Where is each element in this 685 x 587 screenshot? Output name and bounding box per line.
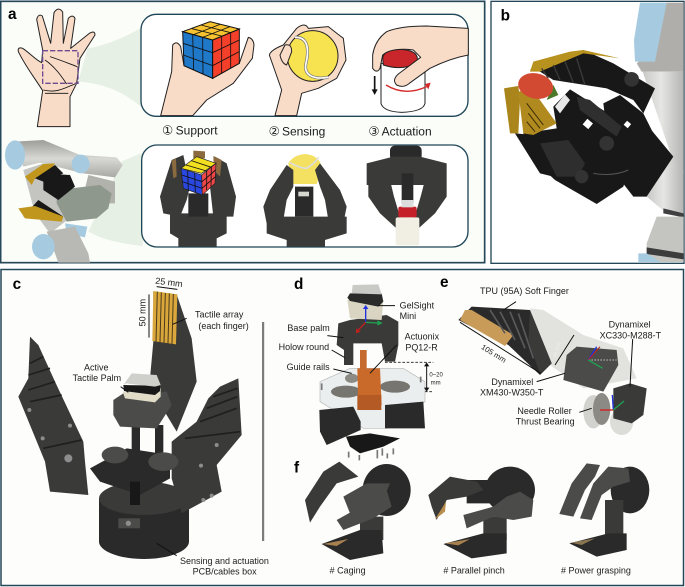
panel b: gripper holding strawberry xyxy=(491,1,684,263)
leader lines xyxy=(503,302,633,412)
fingers with tactile array xyxy=(504,86,557,177)
label: 25 mm: 25 mm xyxy=(155,276,183,289)
soft finger xyxy=(458,307,552,375)
label: sensing: ② xyxy=(269,124,280,138)
label: xc330: XC330-M288-T xyxy=(600,330,662,340)
label: 105 mm: 105 mm xyxy=(480,342,508,365)
label: dynamixel xm: Dynamixel xyxy=(491,377,533,387)
stroke range xyxy=(385,362,433,392)
gripper: parallel pinch xyxy=(428,467,535,558)
label: tactile array: Tactile array xyxy=(195,310,244,320)
label: needle roller: Needle Roller xyxy=(517,406,572,416)
label: base palm: Base palm xyxy=(287,323,330,333)
translucent housing xyxy=(530,308,637,388)
dimension arrows xyxy=(121,287,187,556)
gripper supporting cube xyxy=(160,151,236,247)
icon: hand holding cube xyxy=(161,22,254,116)
panel letter e: e xyxy=(440,274,449,291)
label: PCB cables box: PCB/cables box xyxy=(193,567,257,577)
sensing box cylinder xyxy=(99,482,189,559)
label: mini: Mini xyxy=(400,311,416,321)
divider xyxy=(262,322,264,541)
coordinate axes xyxy=(356,305,383,333)
label: parallel pinch: # Parallel pinch xyxy=(443,566,505,576)
panel: human hand interactions xyxy=(141,14,468,116)
label: power grasping: # Power grasping xyxy=(561,566,631,576)
panel c: gripper overview xyxy=(13,276,269,577)
panel a: human palm functions and gripper analogues xyxy=(1,1,485,263)
gripper: caging xyxy=(305,462,411,560)
actuator orange xyxy=(357,350,382,410)
panel letter a: a xyxy=(8,6,17,23)
icon: strawberry xyxy=(516,70,558,102)
label: guide rails: Guide rails xyxy=(287,362,330,372)
icon: human hand with palm region xyxy=(18,9,95,127)
panel: gripper interactions xyxy=(142,145,468,247)
panel e: finger and joints xyxy=(458,286,662,435)
label: 40 mm: 40 mm xyxy=(552,342,563,358)
label: caging: # Caging xyxy=(330,566,366,576)
gripper actuating jar xyxy=(367,146,447,245)
label: support: ① xyxy=(162,124,173,138)
label: xm430: XM430-W350-T xyxy=(480,388,544,398)
label: support: Support xyxy=(176,124,218,138)
bearing discs xyxy=(331,374,410,398)
panel d: exploded palm view xyxy=(279,276,443,460)
label: each finger: (each finger) xyxy=(198,321,249,331)
label: actuation: ③ xyxy=(368,124,380,138)
gripper sensing ball xyxy=(263,154,347,247)
XM430 motor xyxy=(563,347,618,392)
leader lines xyxy=(327,306,397,373)
robot arm xyxy=(634,3,684,262)
motors xyxy=(319,402,425,445)
label: sensing: Sensing xyxy=(282,124,325,138)
icon: hand twisting jar cap xyxy=(372,26,468,112)
XC330 motor xyxy=(613,383,647,423)
back finger with tactile array xyxy=(150,291,197,432)
gelsight mini xyxy=(347,284,383,320)
label: TPU finger: TPU (95A) Soft Finger xyxy=(480,286,569,296)
right finger xyxy=(172,378,242,513)
base palm xyxy=(337,315,398,365)
coordinate axes xyxy=(588,347,624,410)
active tactile palm xyxy=(113,373,172,428)
label: thrust bearing: Thrust Bearing xyxy=(516,417,575,427)
panel letter f: f xyxy=(294,459,300,476)
dimension arrows xyxy=(460,322,574,373)
label: active: Active xyxy=(84,362,108,372)
gripper body xyxy=(523,50,673,204)
label: actuonix: Actuonix xyxy=(405,332,440,342)
label: range: 0~20 xyxy=(429,372,443,378)
left finger xyxy=(18,337,88,495)
funnel: palm to hand illustrations xyxy=(78,27,142,107)
label: sensing and actuation: Sensing and actuation xyxy=(180,556,269,566)
translucent base plate xyxy=(320,368,425,428)
panel c-f container xyxy=(1,270,684,586)
panel letter d: d xyxy=(294,276,303,293)
icon: hand holding tennis ball xyxy=(269,25,346,116)
label: dynamixel xc: Dynamixel xyxy=(609,320,651,330)
panel f: grasp modes xyxy=(294,459,649,576)
bearing assemblies xyxy=(583,393,633,435)
panel letter c: c xyxy=(13,276,22,293)
label: PQ12-R: PQ12-R xyxy=(405,342,438,352)
funnel: robot to gripper illustrations xyxy=(88,153,143,246)
label: actuation: Actuation xyxy=(382,124,432,138)
central platform xyxy=(90,425,178,505)
label: mm: mm xyxy=(431,380,441,386)
label: tactile palm: Tactile Palm xyxy=(73,373,121,383)
label: 50 mm: 50 mm xyxy=(137,299,147,326)
robot arm with gripper xyxy=(5,140,123,263)
gripper: power grasping xyxy=(559,463,649,557)
star plate and screws xyxy=(322,377,421,460)
panel letter b: b xyxy=(501,8,510,25)
label: holow round: Holow round xyxy=(279,342,329,352)
label: gelsight: GelSight xyxy=(400,300,435,310)
